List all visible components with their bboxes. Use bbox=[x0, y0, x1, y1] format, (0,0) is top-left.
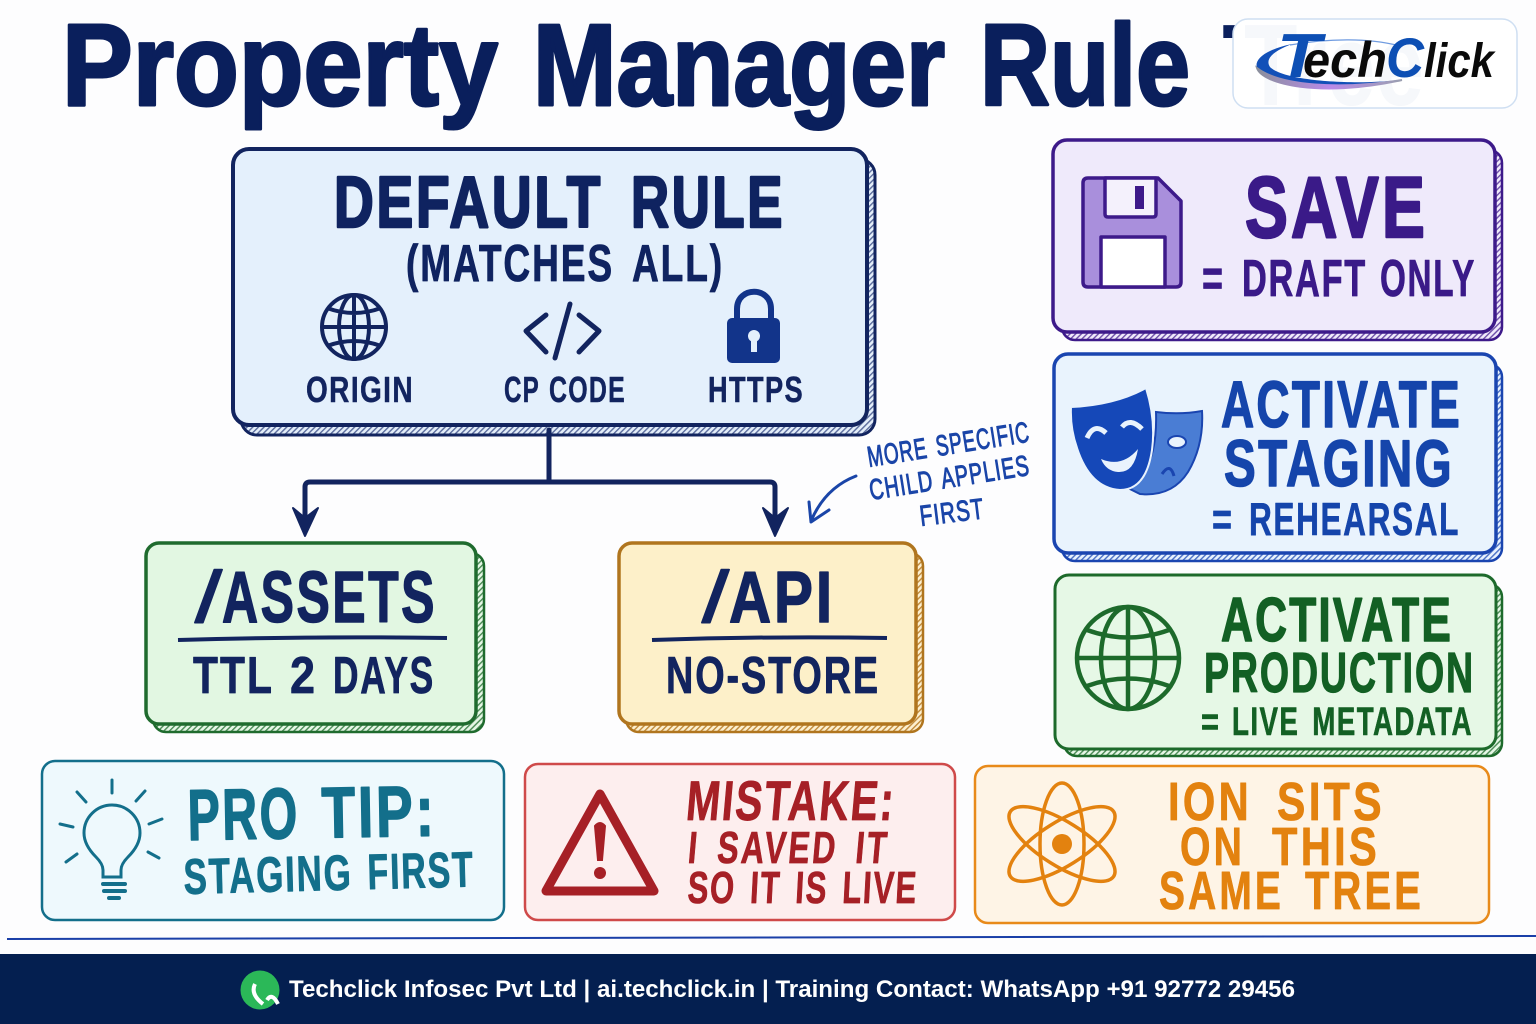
value: no-store: NO-STORE bbox=[666, 647, 880, 705]
panel: assets bbox=[146, 543, 484, 732]
icon: globe origin bbox=[322, 295, 386, 359]
label: https: HTTPS bbox=[708, 369, 804, 410]
path label: api: API bbox=[729, 558, 835, 638]
note: more specific child applies first: CHILD APPLIES bbox=[867, 450, 1032, 507]
arrow: note pointer bbox=[809, 476, 856, 522]
title: Rule bbox=[980, 0, 1190, 130]
arrow: tree connectors bbox=[293, 430, 788, 536]
heading: mistake: MISTAKE: bbox=[684, 769, 898, 832]
logo: TechClick: T bbox=[1277, 22, 1327, 91]
title bbox=[62, 0, 1293, 130]
label: cp code: CODE bbox=[549, 369, 626, 410]
label: cp code: CP bbox=[504, 369, 540, 410]
text: live metadata: = bbox=[1201, 700, 1219, 744]
logo: TechClick: ech bbox=[1303, 32, 1387, 88]
logo: TechClick: lick bbox=[1424, 35, 1496, 88]
icon: light bulb bbox=[60, 780, 162, 898]
path label: api: / bbox=[702, 558, 729, 638]
footer text: Techclick Infosec Pvt Ltd | ai.techclick.in | Training Contact: WhatsApp +91 92772 29456 bbox=[289, 976, 1295, 1003]
icon: whatsapp bbox=[240, 970, 280, 1010]
panel: activate staging: STAGING bbox=[1224, 426, 1454, 500]
text: staging first: STAGING bbox=[183, 845, 353, 905]
panel: activate production bbox=[1055, 575, 1502, 756]
logo: TechClick: Tree bbox=[1244, 0, 1424, 130]
heading: default rule: RULE bbox=[631, 163, 785, 243]
text: draft only: DRAFT bbox=[1242, 250, 1367, 308]
note: more specific child applies first: MORE SPECIFIC bbox=[865, 417, 1032, 474]
panel: activate staging bbox=[1054, 354, 1502, 561]
heading: default rule: DEFAULT bbox=[334, 163, 603, 243]
icon: globe production bbox=[1077, 607, 1179, 709]
title: T bbox=[1222, 0, 1293, 130]
logo: TechClick: C bbox=[1386, 26, 1425, 89]
subheading: matches all: ALL) bbox=[632, 235, 724, 293]
icon: code brackets bbox=[526, 304, 599, 358]
panel: ion: TREE bbox=[1305, 861, 1424, 921]
heading: pro tip: TIP: bbox=[321, 772, 437, 854]
icon: atom bbox=[999, 783, 1125, 905]
panel: api bbox=[619, 543, 923, 732]
label: origin: ORIGIN bbox=[306, 369, 414, 410]
panel: ion: SAME bbox=[1159, 861, 1284, 921]
footer bar bbox=[0, 954, 1536, 1024]
heading: pro tip: PRO bbox=[187, 774, 300, 856]
panel: mistake bbox=[525, 764, 955, 920]
heading: save: SAVE bbox=[1245, 160, 1428, 256]
value: ttl 2 days: DAYS bbox=[333, 647, 435, 705]
text: ion sits on this same tree: ION bbox=[1168, 772, 1252, 832]
text: ion sits on this same tree: SITS bbox=[1277, 772, 1385, 832]
note: more specific child applies first: FIRST bbox=[918, 493, 986, 533]
icon: padlock bbox=[727, 292, 780, 363]
icon: floppy disk bbox=[1083, 178, 1181, 287]
path label: assets: / bbox=[195, 558, 222, 638]
note: more specific child applies first bbox=[865, 417, 1032, 533]
text: draft only: ONLY bbox=[1380, 250, 1476, 308]
panel: pro tip bbox=[42, 761, 504, 920]
panel: save bbox=[1053, 140, 1502, 340]
value: ttl 2 days: TTL bbox=[193, 647, 274, 705]
text: draft only: = bbox=[1202, 250, 1223, 308]
panel: ion: THIS bbox=[1272, 817, 1380, 877]
value: ttl 2 days: 2 bbox=[290, 647, 315, 705]
text: staging first: FIRST bbox=[367, 841, 475, 900]
panel: ion bbox=[975, 766, 1489, 923]
title: Property bbox=[62, 0, 498, 130]
path label: assets: ASSETS bbox=[222, 558, 437, 638]
icon: warning triangle bbox=[546, 794, 654, 891]
panel: default rule bbox=[233, 149, 875, 435]
text: i saved it so it is live: I SAVED IT bbox=[686, 822, 892, 873]
subheading: matches all: (MATCHES bbox=[406, 235, 614, 293]
text: rehearsal: = bbox=[1212, 493, 1232, 545]
icon: theatre masks bbox=[1071, 388, 1202, 494]
panel: ion: ON bbox=[1180, 817, 1245, 877]
title: Manager bbox=[533, 0, 945, 130]
panel: mistake: SO IT IS LIVE bbox=[686, 862, 919, 913]
